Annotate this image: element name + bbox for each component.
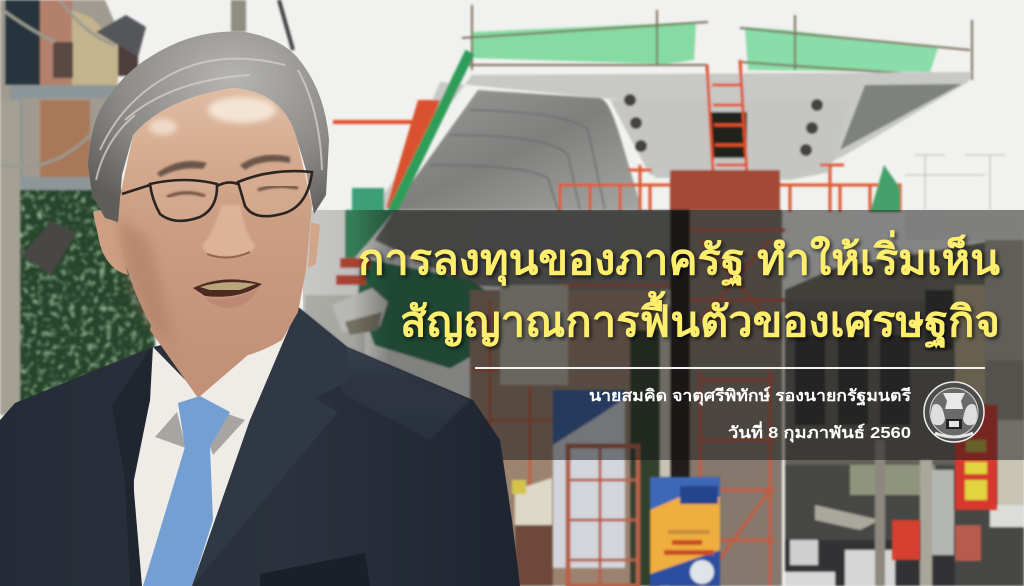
icon: government seal	[924, 382, 984, 442]
headline: การลงทุนของภาครัฐ ทำให้เริ่มเห็น	[358, 230, 1000, 287]
right shoulder sheen	[298, 307, 470, 440]
green safety netting	[472, 22, 696, 64]
right ear	[308, 222, 320, 268]
hair strands	[96, 59, 322, 180]
collar shadow	[155, 412, 245, 455]
under deck shadow	[375, 210, 690, 290]
red and yellow shop signs	[892, 405, 997, 561]
red pier head scaffolding	[560, 165, 900, 212]
byline: นายสมคิด จาตุศรีพิทักษ์ รองนายกรัฐมนตรี	[589, 386, 911, 406]
portrait of speaker	[0, 32, 520, 586]
lamp	[332, 288, 388, 332]
left ear	[93, 210, 128, 275]
red ladder	[707, 60, 750, 225]
mouth	[193, 279, 262, 297]
street scene behind the band	[305, 210, 1024, 586]
tie	[143, 396, 230, 586]
byline: วันที่ 8 กุมภาพันธ์ 2560	[728, 421, 911, 443]
hair	[88, 32, 329, 222]
photo: elevated railway under construction	[333, 5, 1005, 225]
building block right	[785, 235, 1024, 586]
eyebrows	[157, 155, 290, 177]
headline	[358, 230, 1000, 349]
photo: street and electrical pole on left	[0, 0, 293, 415]
forehead highlight	[208, 97, 276, 123]
red scaffold left	[470, 290, 690, 586]
green net	[345, 210, 395, 258]
shirt	[132, 310, 298, 586]
scaffold rails	[462, 5, 972, 80]
anchors	[624, 94, 823, 156]
face shading	[118, 215, 175, 345]
headline: สัญญาณการฟื้นตัวของเศรษฐกิจ	[400, 290, 1000, 349]
edge netting	[392, 52, 470, 212]
yellow call-center banner	[650, 477, 720, 586]
right lapel	[192, 307, 350, 586]
translucent dark band	[303, 210, 1024, 460]
glasses	[122, 171, 312, 221]
nose	[202, 205, 255, 256]
left lapel	[112, 347, 152, 586]
face	[116, 88, 312, 361]
antennas	[905, 155, 1005, 210]
nose base	[207, 252, 250, 258]
teeth	[200, 282, 256, 290]
neck	[150, 290, 298, 398]
eyes	[167, 186, 298, 197]
byline	[589, 386, 911, 443]
lower street level	[785, 465, 1024, 586]
suit	[0, 307, 520, 586]
red crane	[333, 120, 415, 124]
forehead glint	[149, 119, 177, 135]
divider line	[475, 367, 985, 369]
blue roadside board with scaffold	[553, 390, 640, 586]
dark opening	[711, 112, 747, 158]
pier head block	[670, 170, 780, 215]
deck underside ribs	[392, 90, 642, 210]
central piers	[630, 330, 660, 586]
lower lip	[205, 288, 258, 308]
red girder support	[386, 100, 440, 208]
deck girder	[372, 72, 972, 210]
pocket	[260, 553, 370, 586]
